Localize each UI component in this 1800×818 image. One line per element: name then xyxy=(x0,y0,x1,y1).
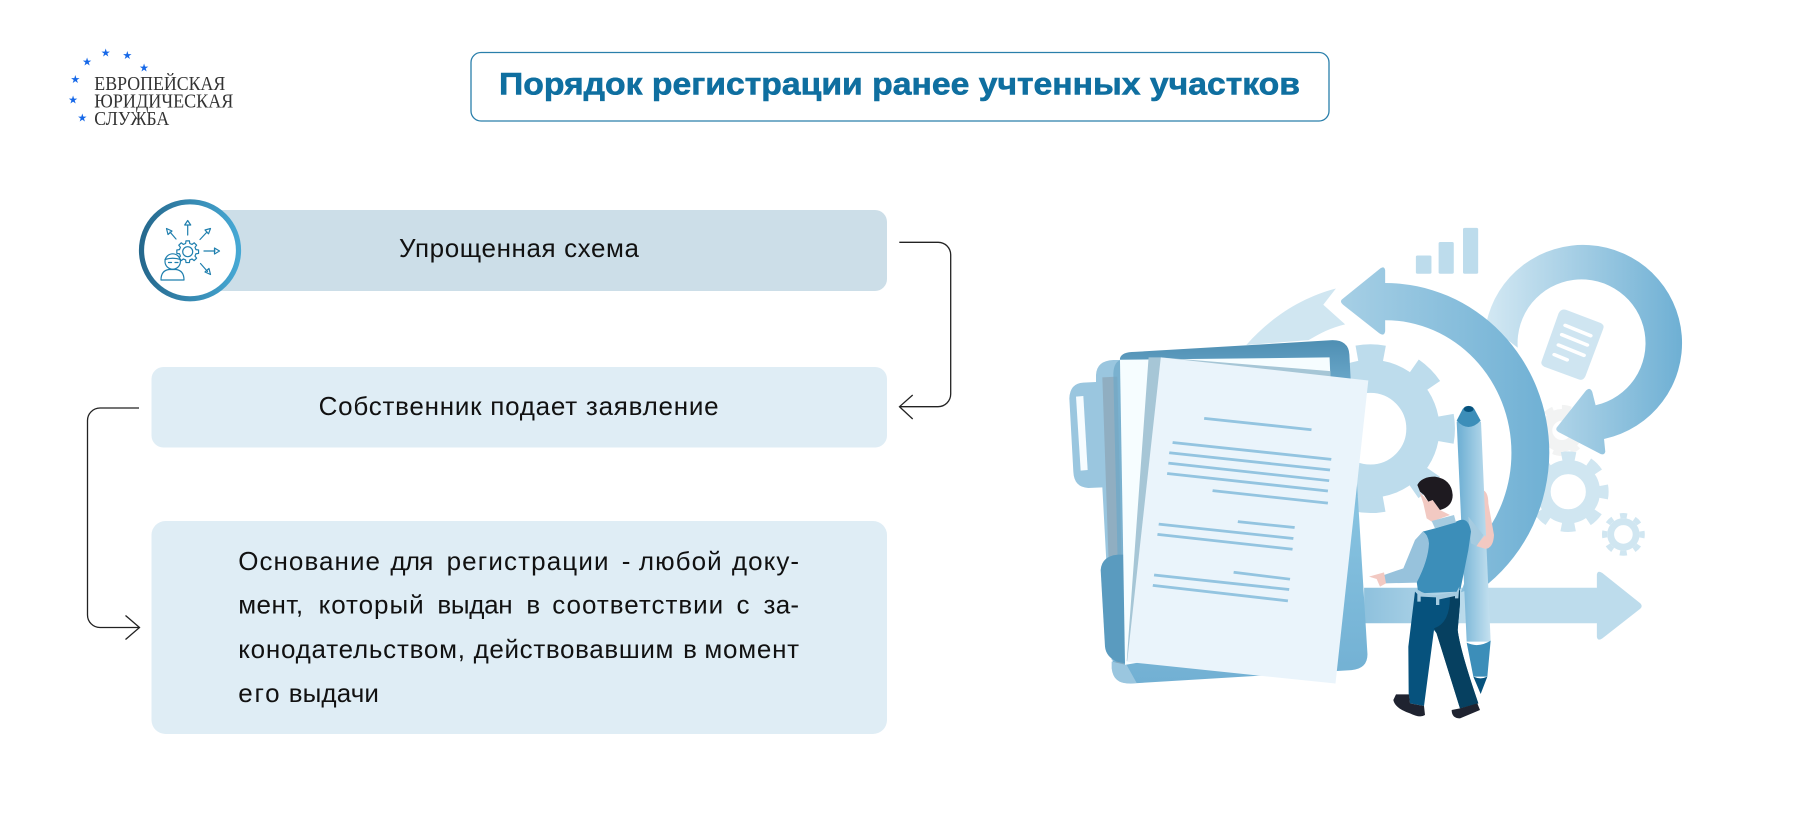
shoes xyxy=(1393,694,1425,716)
title: Порядок регистрации ранее учтенных участков xyxy=(499,66,1300,102)
panel: basis for registration xyxy=(152,521,887,734)
folder shade xyxy=(1102,377,1124,668)
text block: basis line 1 xyxy=(238,546,799,576)
text block: basis line 2: с xyxy=(736,590,750,620)
text block: basis line 3: действовавшим xyxy=(474,634,673,664)
title xyxy=(471,52,1329,121)
text block: basis line 3 xyxy=(238,634,799,664)
logo stars: ★ xyxy=(82,56,92,69)
text block: basis line 4: его xyxy=(238,678,280,708)
pointing hand xyxy=(1369,572,1386,587)
logo stars: ★ xyxy=(77,112,87,125)
panel: simplified scheme xyxy=(190,210,887,291)
lower tab xyxy=(1101,555,1125,663)
medium gear xyxy=(1532,456,1604,528)
white sheet xyxy=(1120,357,1330,665)
logo wordmark: ЕВРОПЕЙСКАЯ xyxy=(94,74,225,95)
logo wordmark xyxy=(94,74,233,130)
blue inner band xyxy=(1113,360,1125,663)
icon: document xyxy=(1541,309,1604,380)
icon: person, gear and arrows xyxy=(142,202,238,299)
large curved arrow xyxy=(1341,267,1549,592)
trousers xyxy=(1408,590,1478,708)
curved arrow with document xyxy=(1486,245,1682,454)
hair xyxy=(1417,477,1453,510)
sheet lines xyxy=(1153,418,1331,601)
small gear xyxy=(1605,516,1642,553)
folder tab xyxy=(1069,360,1127,663)
text block: basis line 3: в xyxy=(683,634,697,664)
panel: owner files application xyxy=(152,367,887,448)
bar chart icon xyxy=(1416,228,1478,274)
hand behind pen xyxy=(1475,491,1494,549)
text block: basis line 2: за- xyxy=(764,590,799,620)
shaded sheet xyxy=(1127,357,1330,661)
text block: basis line 3: момент xyxy=(704,634,799,664)
logo xyxy=(68,47,233,130)
belt xyxy=(1417,587,1459,605)
collar xyxy=(1432,515,1456,528)
text block: basis line 2: выдан xyxy=(437,590,513,620)
text block: basis line 2 xyxy=(238,590,799,620)
pointing sleeve xyxy=(1384,532,1429,583)
text block: basis line 1: - xyxy=(622,546,630,576)
pale curved arrow xyxy=(1246,289,1345,345)
text block: basis line 2: который xyxy=(319,590,424,620)
text block: basis line 1: доку- xyxy=(732,546,799,576)
text block: basis line 1: любой xyxy=(639,546,722,576)
logo stars: ★ xyxy=(70,73,80,86)
logo stars xyxy=(68,47,149,125)
panel: owner files application: Собственник подает заявление xyxy=(319,391,719,421)
text block: basis line 2: в xyxy=(526,590,540,620)
text block: basis line 2: соответствии xyxy=(552,590,723,620)
panel: simplified scheme: Упрощенная схема xyxy=(399,233,640,263)
text block: basis line 3: конодательством, xyxy=(238,634,465,664)
text block: basis line 4: выдачи xyxy=(289,678,379,708)
folder back cover xyxy=(1112,340,1367,684)
logo stars: ★ xyxy=(139,61,149,74)
horizontal arrow xyxy=(1364,572,1642,640)
logo wordmark: ЮРИДИЧЕСКАЯ xyxy=(94,92,233,112)
pale gear behind xyxy=(1539,408,1585,453)
large gear xyxy=(1294,352,1447,505)
arrow: application to basis xyxy=(88,408,140,640)
face and neck xyxy=(1419,492,1450,522)
man holding pen xyxy=(1369,406,1494,718)
text block: basis line 4 xyxy=(238,678,379,708)
document sheets xyxy=(1120,357,1368,684)
bottom corner xyxy=(1112,662,1137,683)
logo stars: ★ xyxy=(122,49,132,62)
arrow: scheme to application xyxy=(899,242,951,419)
illustration: documents, gears and arrows xyxy=(1074,228,1682,714)
vest xyxy=(1417,520,1471,593)
text block: basis line 1: для xyxy=(390,546,433,576)
folder left tabs xyxy=(1069,360,1137,683)
main sheet xyxy=(1127,357,1368,684)
pen xyxy=(1457,406,1491,694)
right sleeve xyxy=(1468,517,1483,546)
logo stars: ★ xyxy=(101,47,111,60)
fingers over pen xyxy=(1476,535,1487,549)
text block: basis line 2: мент, xyxy=(238,590,303,620)
tab slot xyxy=(1076,396,1088,471)
logo wordmark: СЛУЖБА xyxy=(94,109,169,130)
text block: basis line 1: Основание xyxy=(238,546,380,576)
text block: basis line 1: регистрации xyxy=(447,546,608,576)
logo stars: ★ xyxy=(68,93,78,106)
